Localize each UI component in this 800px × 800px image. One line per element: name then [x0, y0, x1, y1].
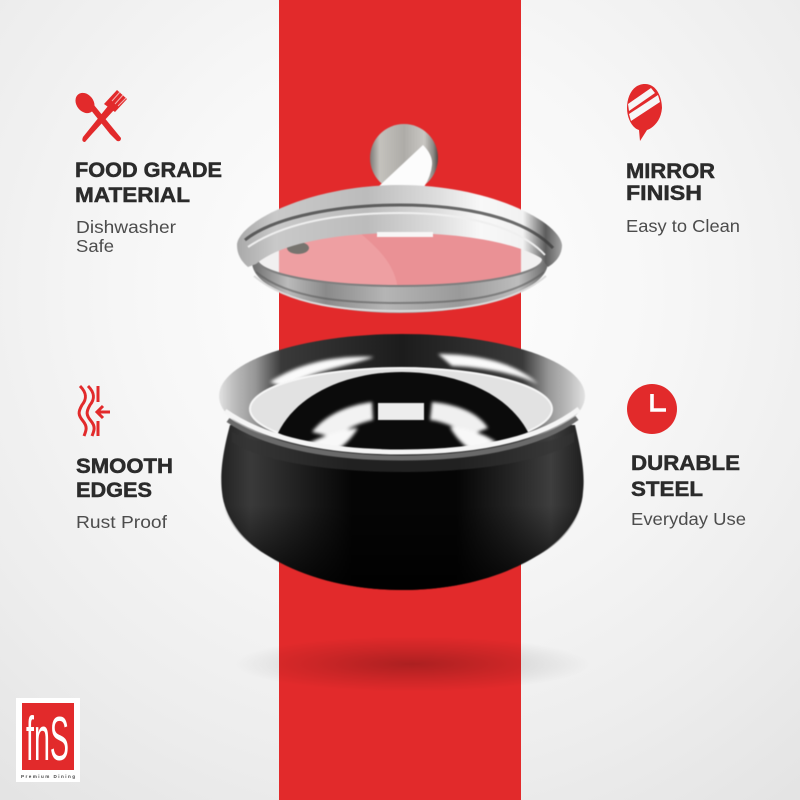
red vertical band [279, 0, 521, 800]
bowl [219, 334, 585, 590]
description line 2: Safe [76, 236, 114, 256]
rim reflections [270, 354, 538, 388]
heading: SMOOTH [76, 455, 173, 478]
icon: spoon and fork [72, 89, 127, 142]
bowl inner dome [278, 371, 528, 450]
bowl floor shadow [234, 636, 590, 692]
lid flange [237, 185, 562, 267]
description: Dishwasher [76, 217, 176, 237]
feature: durable steel [627, 384, 746, 529]
glass screw [287, 242, 309, 254]
logo tagline: Premium Dining [21, 774, 75, 779]
lid knob [370, 124, 438, 192]
feature: food grade material [72, 89, 222, 256]
feature: smooth edges [76, 386, 173, 532]
heading line 2: MATERIAL [75, 184, 190, 207]
icon: smooth edges [79, 386, 110, 436]
bowl inner ring [250, 368, 552, 450]
bowl lower fade [223, 505, 582, 590]
heading line 2: EDGES [76, 479, 152, 502]
description: Rust Proof [76, 512, 167, 532]
heading: DURABLE [631, 452, 740, 475]
description: Everyday Use [631, 509, 746, 529]
icon: clock [627, 384, 677, 434]
bowl black body [221, 425, 584, 590]
brand logo [16, 698, 80, 782]
lid [237, 124, 562, 313]
description: Easy to Clean [626, 216, 740, 236]
brand logo: fnS [26, 705, 69, 774]
lid lower ring [252, 211, 548, 313]
heading: FOOD GRADE [75, 159, 222, 182]
heading: MIRROR [626, 160, 715, 183]
bowl front lip [225, 409, 579, 458]
icon: mirror [627, 84, 662, 141]
feature: mirror finish [626, 84, 740, 236]
heading line 2: FINISH [626, 182, 702, 205]
glass window [258, 233, 543, 288]
heading line 2: STEEL [631, 478, 703, 501]
bowl neck shading [232, 432, 574, 472]
bowl rim [219, 334, 585, 458]
